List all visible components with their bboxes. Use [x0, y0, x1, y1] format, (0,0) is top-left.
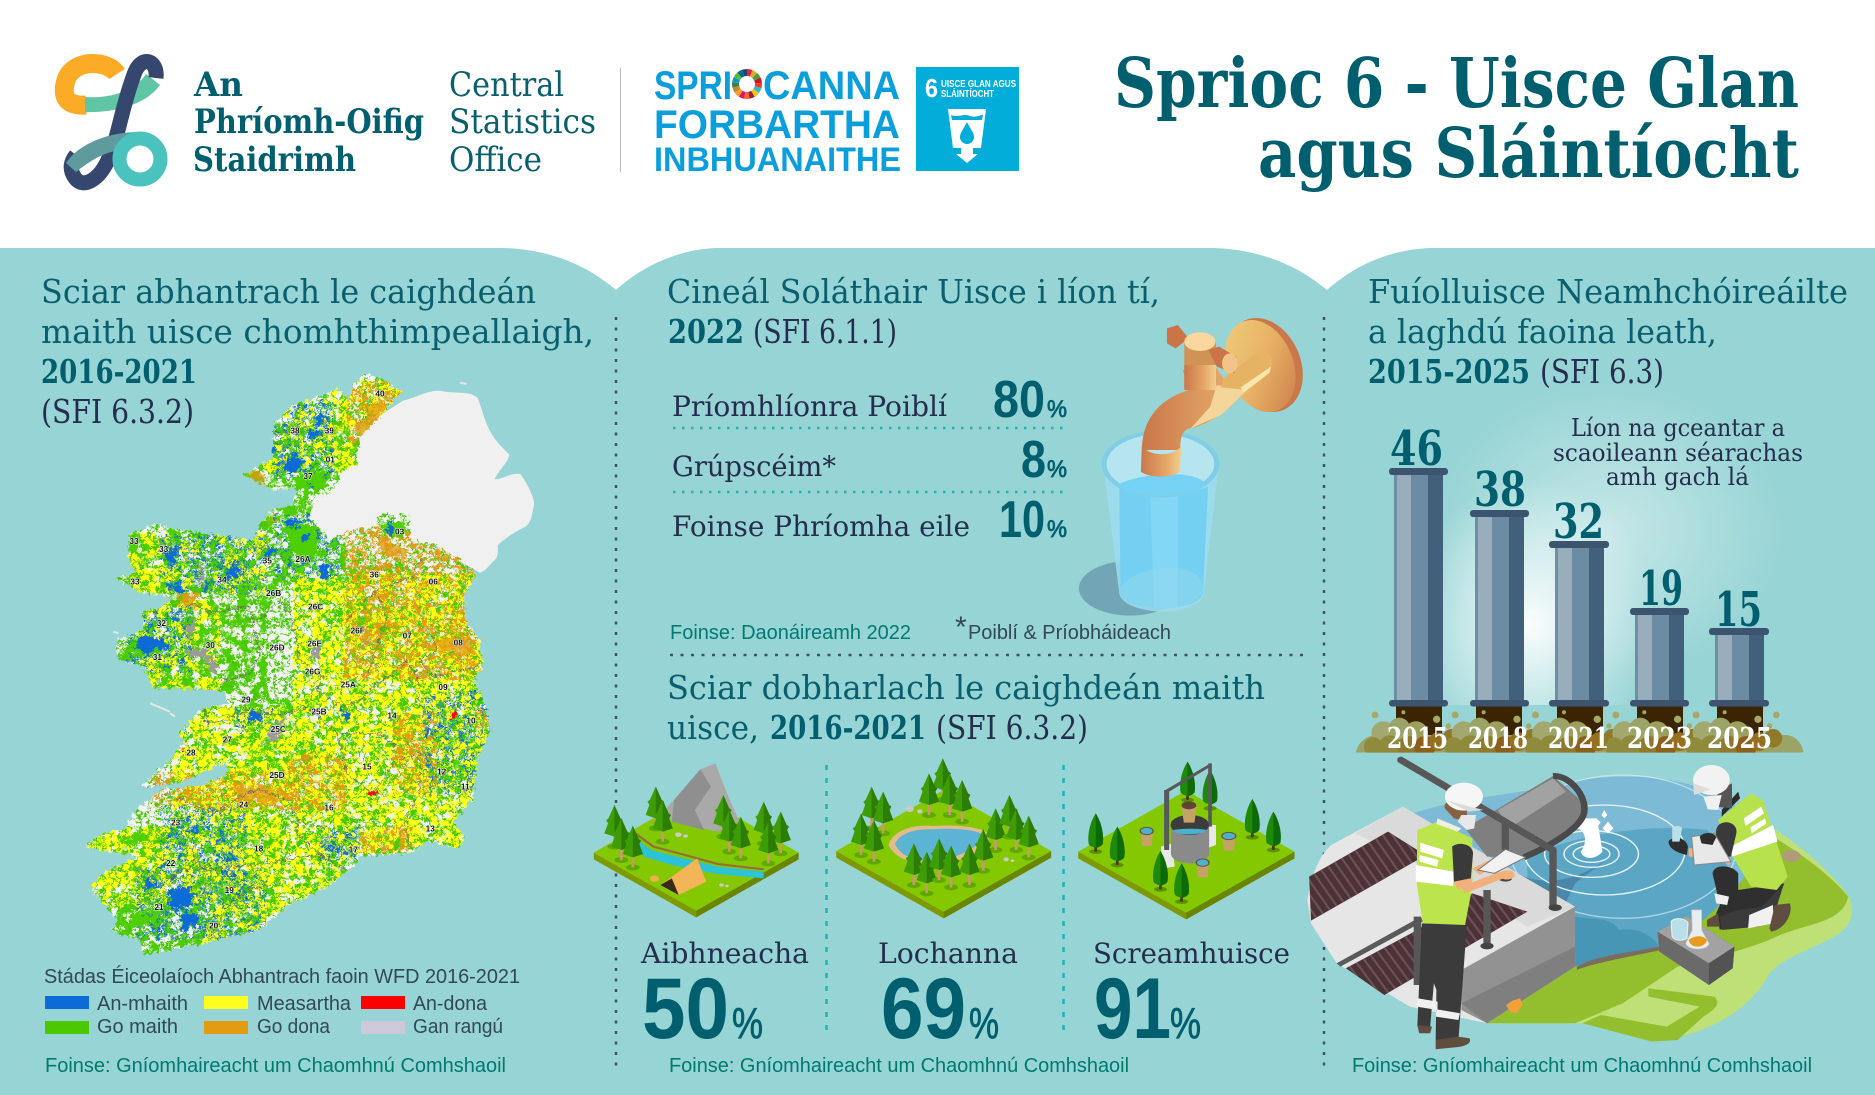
- map: catchment numbers: 26G: [305, 667, 321, 677]
- map: catchment numbers: 26E: [307, 639, 322, 649]
- map: catchment numbers: 36: [370, 569, 379, 579]
- map: unranked lakes: [183, 563, 370, 743]
- stat rows: water supply: [672, 371, 1067, 549]
- legend: ecological status: [44, 965, 520, 1038]
- heading: water supply: [667, 272, 1160, 351]
- map: Northern Ireland: [308, 392, 533, 572]
- illustration: grates: [1309, 832, 1417, 921]
- pipe 2021: [1549, 541, 1609, 736]
- logo: Irish wordmark: Phríomh-Oifig: [194, 102, 424, 142]
- map: catchment numbers: 25B: [311, 707, 327, 717]
- title: [1114, 44, 1800, 194]
- source: census: Foinse: Daonáireamh 2022: [670, 622, 911, 644]
- chart caption: Líon na gceantar a: [1571, 414, 1785, 442]
- map: catchment numbers: 06: [429, 577, 438, 587]
- heading: water bodies: Sciar dobharlach le caighdeán maith: [667, 668, 1265, 707]
- heading: river quality: maith uisce chomhthimpeallaigh,: [41, 312, 594, 351]
- logo: Irish wordmark: [193, 65, 424, 180]
- stat rows: water supply: Grúpscéim*: [672, 450, 836, 483]
- logo: Irish wordmark: An: [193, 65, 243, 105]
- map: catchment numbers: 29: [241, 695, 251, 705]
- logo: CSO symbol: [64, 62, 160, 183]
- chart: values: [1390, 421, 1762, 638]
- stat: lakes: %: [969, 999, 999, 1048]
- stat: groundwater: [1093, 937, 1290, 1057]
- pipe 2025: [1709, 628, 1769, 736]
- map: catchment numbers: 11: [461, 781, 470, 791]
- map: catchment numbers: 33: [130, 577, 140, 587]
- stat rows: water supply: 8: [1021, 431, 1046, 489]
- illustration: rock: [1782, 850, 1801, 862]
- logo: English wordmark: Office: [449, 140, 542, 180]
- illustration: right worker: [1669, 765, 1791, 932]
- chart: years: 2025: [1707, 721, 1772, 755]
- stat: rivers: Aibhneacha: [640, 937, 809, 970]
- map: catchment numbers: 19: [225, 885, 234, 895]
- map: catchment numbers: 25D: [269, 770, 285, 780]
- illustration: left worker: [1416, 783, 1526, 1049]
- heading: wastewater: 2015-2025: [1368, 352, 1530, 391]
- dividers between water types: [826, 765, 1064, 1038]
- map: catchment numbers: 13: [426, 824, 435, 834]
- chart: years: [1387, 721, 1772, 755]
- illustration: testing kit: [1658, 910, 1735, 985]
- chart: pipe columns: [1389, 468, 1769, 736]
- pipe 2018: [1470, 510, 1529, 736]
- chart caption: [1553, 414, 1803, 491]
- map: catchment numbers: 34: [217, 575, 227, 585]
- stat rows: water supply: %: [1047, 456, 1067, 483]
- illustration: wastewater inspection: [1300, 760, 1852, 1049]
- map: blue rivers network: [127, 400, 490, 940]
- map: catchment numbers: [129, 389, 476, 931]
- icon: SDG 6 tile: UISCE GLAN AGUS: [941, 78, 1016, 90]
- icon: SDG colour wheel: [736, 72, 758, 96]
- heading: water supply: (SFI 6.1.1): [753, 312, 897, 351]
- logo: SDG wordmark: FORBARTHA: [654, 103, 900, 147]
- stat rows: water supply: Príomhlíonra Poiblí: [672, 390, 948, 423]
- panel: teal scalloped background: [0, 248, 1875, 1095]
- map: catchment numbers: 26B: [266, 588, 281, 598]
- map: high status areas: [133, 410, 475, 935]
- stat: groundwater: 91: [1094, 961, 1171, 1057]
- stat: groundwater: Screamhuisce: [1093, 937, 1290, 970]
- stat rows: water supply: %: [1047, 396, 1067, 423]
- map: catchment numbers: 23: [171, 817, 181, 827]
- map: bad status reaches: [147, 707, 457, 824]
- icon: lake tile: [836, 758, 1051, 918]
- map: catchment boundaries: [167, 560, 477, 907]
- source: water bodies: Foinse: Gníomhaireacht um Chaomhnú Comhshaoil: [669, 1055, 1129, 1077]
- map: poor status clusters: [183, 393, 473, 803]
- logo: English wordmark: [449, 65, 596, 180]
- heading: wastewater: a laghdú faoina leath,: [1368, 312, 1717, 351]
- map: catchment numbers: 35: [263, 556, 272, 566]
- legend: ecological status: An-dona: [413, 993, 488, 1015]
- illustrations: isometric tiles: [594, 758, 1295, 919]
- chart: years: 2023: [1627, 721, 1692, 755]
- map: catchment numbers: 25C: [271, 724, 286, 734]
- map: good status solids: [118, 468, 407, 928]
- icon: SDG 6 tile: SLÁINTÍOCHT: [941, 87, 994, 100]
- map: catchment numbers: 25A: [341, 679, 356, 689]
- heading: water supply: Cineál Soláthair Uisce i líon tí,: [667, 272, 1160, 311]
- pipe 2015: [1389, 468, 1448, 736]
- legend: ecological status: Gan rangú: [413, 1016, 503, 1038]
- title: agus Sláintíocht: [1258, 114, 1800, 194]
- chart: years: 2018: [1468, 721, 1528, 755]
- stat: lakes: Lochanna: [878, 937, 1018, 970]
- heading: river quality: Sciar abhantrach le caighdeán: [41, 272, 536, 311]
- chart: years: 2015: [1387, 721, 1448, 755]
- heading: river quality: 2016-2021: [41, 352, 197, 391]
- heading: water supply: 2022: [668, 312, 744, 351]
- icon: SDG 6 tile: 6: [925, 73, 938, 103]
- legend: ecological status: An-mhaith: [97, 993, 188, 1015]
- stat rows: water supply: 10: [999, 491, 1045, 549]
- map: islands: [113, 383, 467, 717]
- source: census: *: [955, 611, 967, 644]
- map: catchment numbers: 28: [186, 748, 196, 758]
- stat: lakes: [878, 937, 1018, 1057]
- logo: SDG wordmark: SPRI: [654, 64, 732, 108]
- heading: river quality: (SFI 6.3.2): [41, 392, 194, 431]
- chart: soil mound: [1356, 710, 1803, 758]
- chart: values: 19: [1639, 561, 1683, 617]
- icon: river tile: [594, 763, 799, 917]
- illustration: water: [1414, 777, 1764, 967]
- stat rows: water supply: Foinse Phríomha eile: [672, 510, 970, 543]
- map: catchment numbers: 24: [239, 800, 249, 810]
- divider line: [620, 68, 621, 172]
- stat: rivers: 50: [642, 961, 729, 1057]
- map: catchment numbers: 31: [153, 652, 162, 662]
- illustration: concrete platform: [1307, 807, 1575, 1023]
- illustration: discharge pipe: [1465, 776, 1586, 857]
- map: catchment numbers: 26A: [295, 554, 311, 564]
- map: catchment numbers: 30: [206, 640, 215, 650]
- heading: water bodies: 2016-2021: [770, 708, 926, 747]
- logo: Irish wordmark: Staidrimh: [193, 140, 356, 180]
- map: catchment numbers: 20: [209, 921, 219, 931]
- map: catchment numbers: 08: [454, 638, 463, 648]
- map: catchment numbers: 32: [157, 618, 166, 628]
- stat rows: water supply: 80: [993, 371, 1045, 429]
- logo: English wordmark: Statistics: [449, 102, 596, 142]
- icon: SDG 6 tile: [916, 67, 1019, 171]
- map: catchment numbers: 12: [437, 766, 447, 776]
- map: catchment numbers: 22: [166, 858, 176, 868]
- legend: ecological status: Go dona: [257, 1016, 331, 1038]
- map: Ireland river water quality: [86, 373, 534, 956]
- map: catchment numbers: 15: [362, 762, 372, 772]
- illustration: tap and glass: [1079, 312, 1313, 616]
- heading: wastewater: Fuíolluisce Neamhchóireáilte: [1368, 272, 1848, 311]
- dotted dividers between panels: [616, 317, 1324, 1070]
- legend: ecological status: Stádas Éiceolaíoch Abhantrach faoin WFD 2016-2021: [44, 965, 520, 988]
- map: catchment numbers: 01: [326, 455, 335, 465]
- map: catchment numbers: 38: [290, 425, 300, 435]
- icon: well tile: [1078, 762, 1295, 919]
- chart caption: scaoileann séarachas: [1553, 439, 1803, 467]
- stat: rivers: %: [732, 999, 763, 1048]
- map: catchment numbers: 03: [395, 527, 405, 537]
- logo: SDG wordmark: INBHUANAITHE: [654, 141, 901, 179]
- stat: lakes: 69: [881, 961, 966, 1057]
- map: catchment numbers: 26F: [350, 625, 365, 635]
- map: catchment numbers: 33: [129, 536, 139, 546]
- map: catchment numbers: 39: [325, 425, 334, 435]
- map: catchment numbers: 26C: [308, 602, 323, 612]
- chart glow: [1443, 407, 1753, 705]
- logo: SDG wordmark: [654, 64, 901, 179]
- chart: years: 2021: [1548, 721, 1609, 755]
- map: catchment numbers: 26D: [269, 643, 285, 653]
- map: catchment numbers: 18: [254, 843, 264, 853]
- map: catchment numbers: 40: [375, 389, 385, 399]
- legend: ecological status: Go maith: [97, 1016, 178, 1038]
- map: catchment numbers: 21: [154, 902, 164, 912]
- source: census: Poiblí & Príobháideach: [968, 622, 1171, 644]
- map: catchment numbers: 10: [466, 715, 476, 725]
- heading: river quality: [41, 272, 594, 431]
- source: rivers: Foinse: Gníomhaireacht um Chaomhnú Comhshaoil: [45, 1055, 506, 1077]
- map: catchment numbers: 33: [159, 544, 169, 554]
- pipe 2023: [1630, 608, 1689, 736]
- map: catchment numbers: 07: [403, 631, 412, 641]
- chart: values: 38: [1474, 462, 1526, 518]
- map: catchment numbers: 17: [349, 844, 358, 854]
- chart: values: 15: [1715, 582, 1762, 638]
- illustration: flower: [1506, 998, 1523, 1013]
- heading: water bodies: uisce,: [667, 708, 759, 747]
- heading: wastewater: [1368, 272, 1848, 391]
- source: census: [670, 611, 1171, 644]
- legend: ecological status: Measartha: [257, 993, 352, 1015]
- logo: English wordmark: Central: [449, 65, 564, 105]
- stat rows: water supply: %: [1047, 516, 1067, 543]
- stat: rivers: [640, 937, 809, 1057]
- heading: water bodies: (SFI 6.3.2): [936, 708, 1088, 747]
- chart caption: amh gach lá: [1606, 463, 1749, 491]
- heading: wastewater: (SFI 6.3): [1540, 352, 1664, 391]
- illustration: ripples: [1509, 775, 1736, 918]
- chart: values: 32: [1553, 494, 1604, 550]
- source: wastewater: Foinse: Gníomhaireacht um Chaomhnú Comhshaoil: [1352, 1055, 1812, 1077]
- logo: SDG wordmark: CANNA: [763, 64, 900, 108]
- chart: values: 46: [1390, 421, 1443, 477]
- heading: water bodies: [667, 668, 1265, 747]
- illustration: grass: [1487, 828, 1852, 1042]
- map: catchment numbers: 09: [438, 682, 448, 692]
- map: catchment numbers: 37: [303, 471, 313, 481]
- map: catchment numbers: 27: [223, 735, 232, 745]
- stat: groundwater: %: [1170, 999, 1201, 1048]
- map: catchment numbers: 14: [387, 710, 397, 720]
- map: catchment numbers: 16: [324, 802, 334, 812]
